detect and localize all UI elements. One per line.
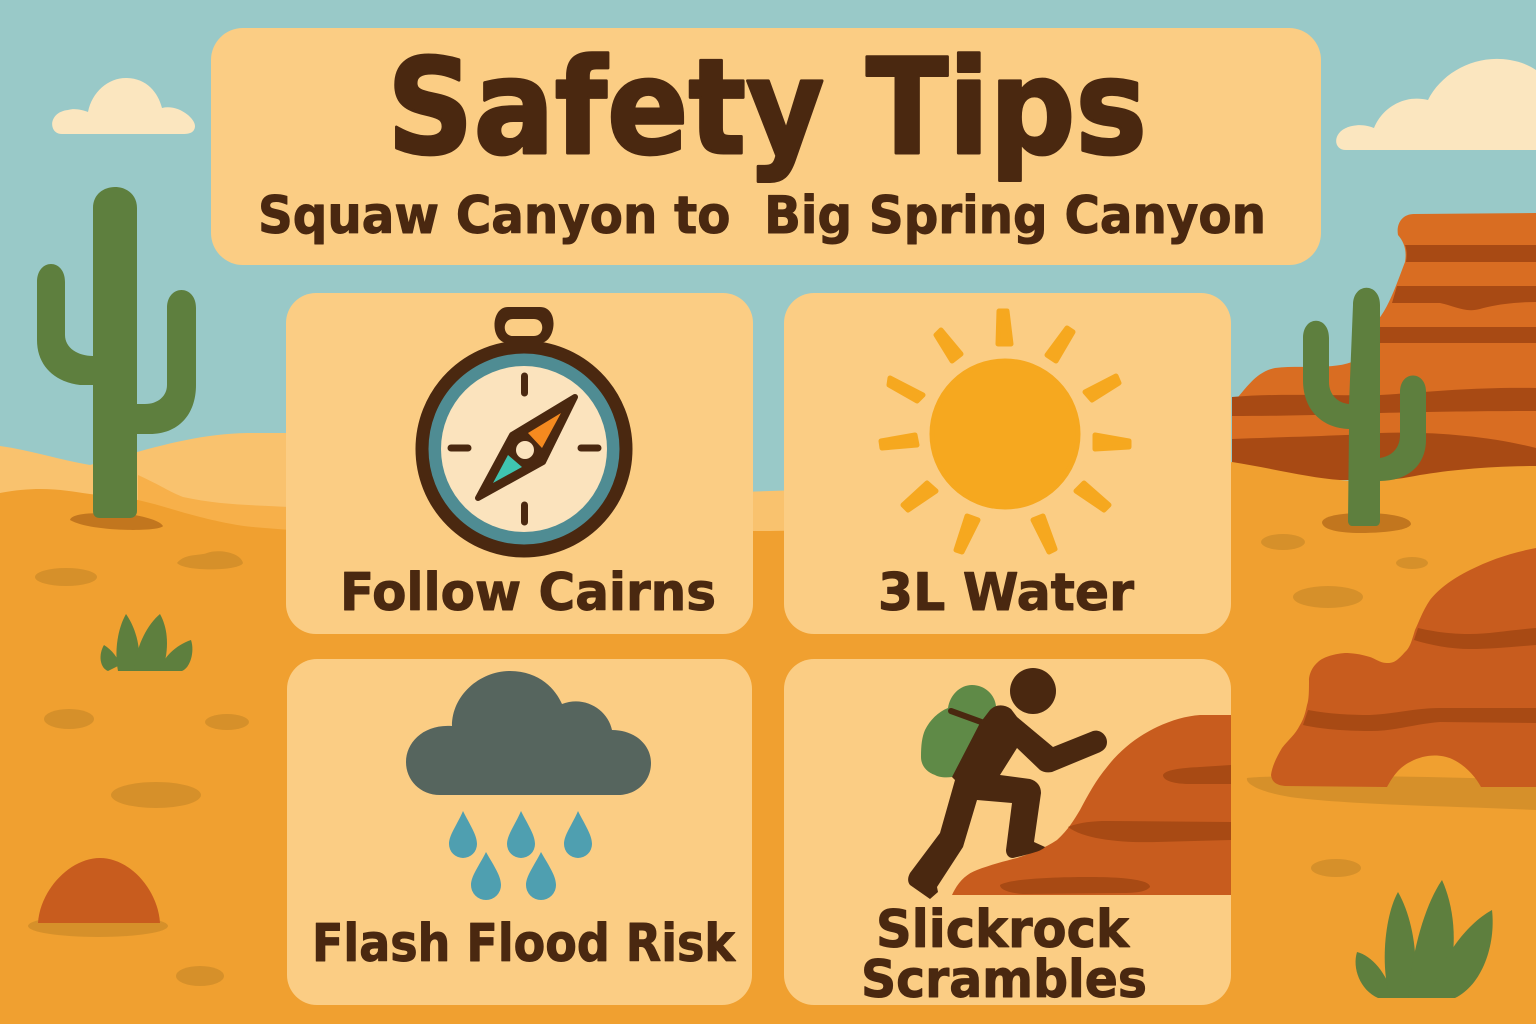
sand dune far left bbox=[0, 433, 300, 540]
label: Slickrock bbox=[876, 900, 1130, 960]
title panel bbox=[211, 28, 1321, 265]
desert ground bbox=[0, 462, 1536, 1024]
subtitle: Squaw Canyon to Big Spring Canyon bbox=[258, 186, 1266, 246]
rain drops bbox=[449, 811, 592, 900]
panel: slickrock scrambles bbox=[784, 659, 1231, 1010]
label: 3L Water bbox=[878, 563, 1134, 623]
saguaro cactus left bbox=[37, 187, 196, 530]
cloud left bbox=[52, 78, 195, 134]
small rock lower left bbox=[28, 858, 168, 937]
shrub left bbox=[101, 614, 192, 671]
saguaro cactus right bbox=[1303, 288, 1426, 533]
backpack strap bbox=[951, 711, 984, 723]
label: Follow Cairns bbox=[340, 563, 716, 623]
icon: hiker bbox=[908, 668, 1107, 899]
rock formation lower right bbox=[1247, 548, 1536, 810]
heading: Safety Tips bbox=[387, 31, 1147, 185]
panel: follow cairns bbox=[286, 293, 753, 634]
icon: rain cloud bbox=[406, 671, 651, 900]
panel: flash flood risk bbox=[287, 659, 752, 1005]
icon: sun bbox=[881, 311, 1129, 552]
backpack bbox=[921, 685, 996, 777]
sand dune middle bbox=[0, 475, 1100, 560]
panel: slickrock scrambles: Scrambles bbox=[861, 950, 1147, 1010]
hiker figure bbox=[908, 705, 1107, 899]
icon: slickrock bbox=[952, 715, 1231, 895]
sand shapes on ground bbox=[35, 534, 1428, 986]
shrub right bbox=[1356, 880, 1493, 998]
icon: compass bbox=[422, 307, 626, 551]
label: Flash Flood Risk bbox=[312, 914, 736, 974]
rock mesa right bbox=[1232, 213, 1536, 480]
hiker head bbox=[1010, 668, 1056, 714]
panel: 3L water bbox=[784, 293, 1231, 634]
cloud right bbox=[1336, 59, 1536, 150]
